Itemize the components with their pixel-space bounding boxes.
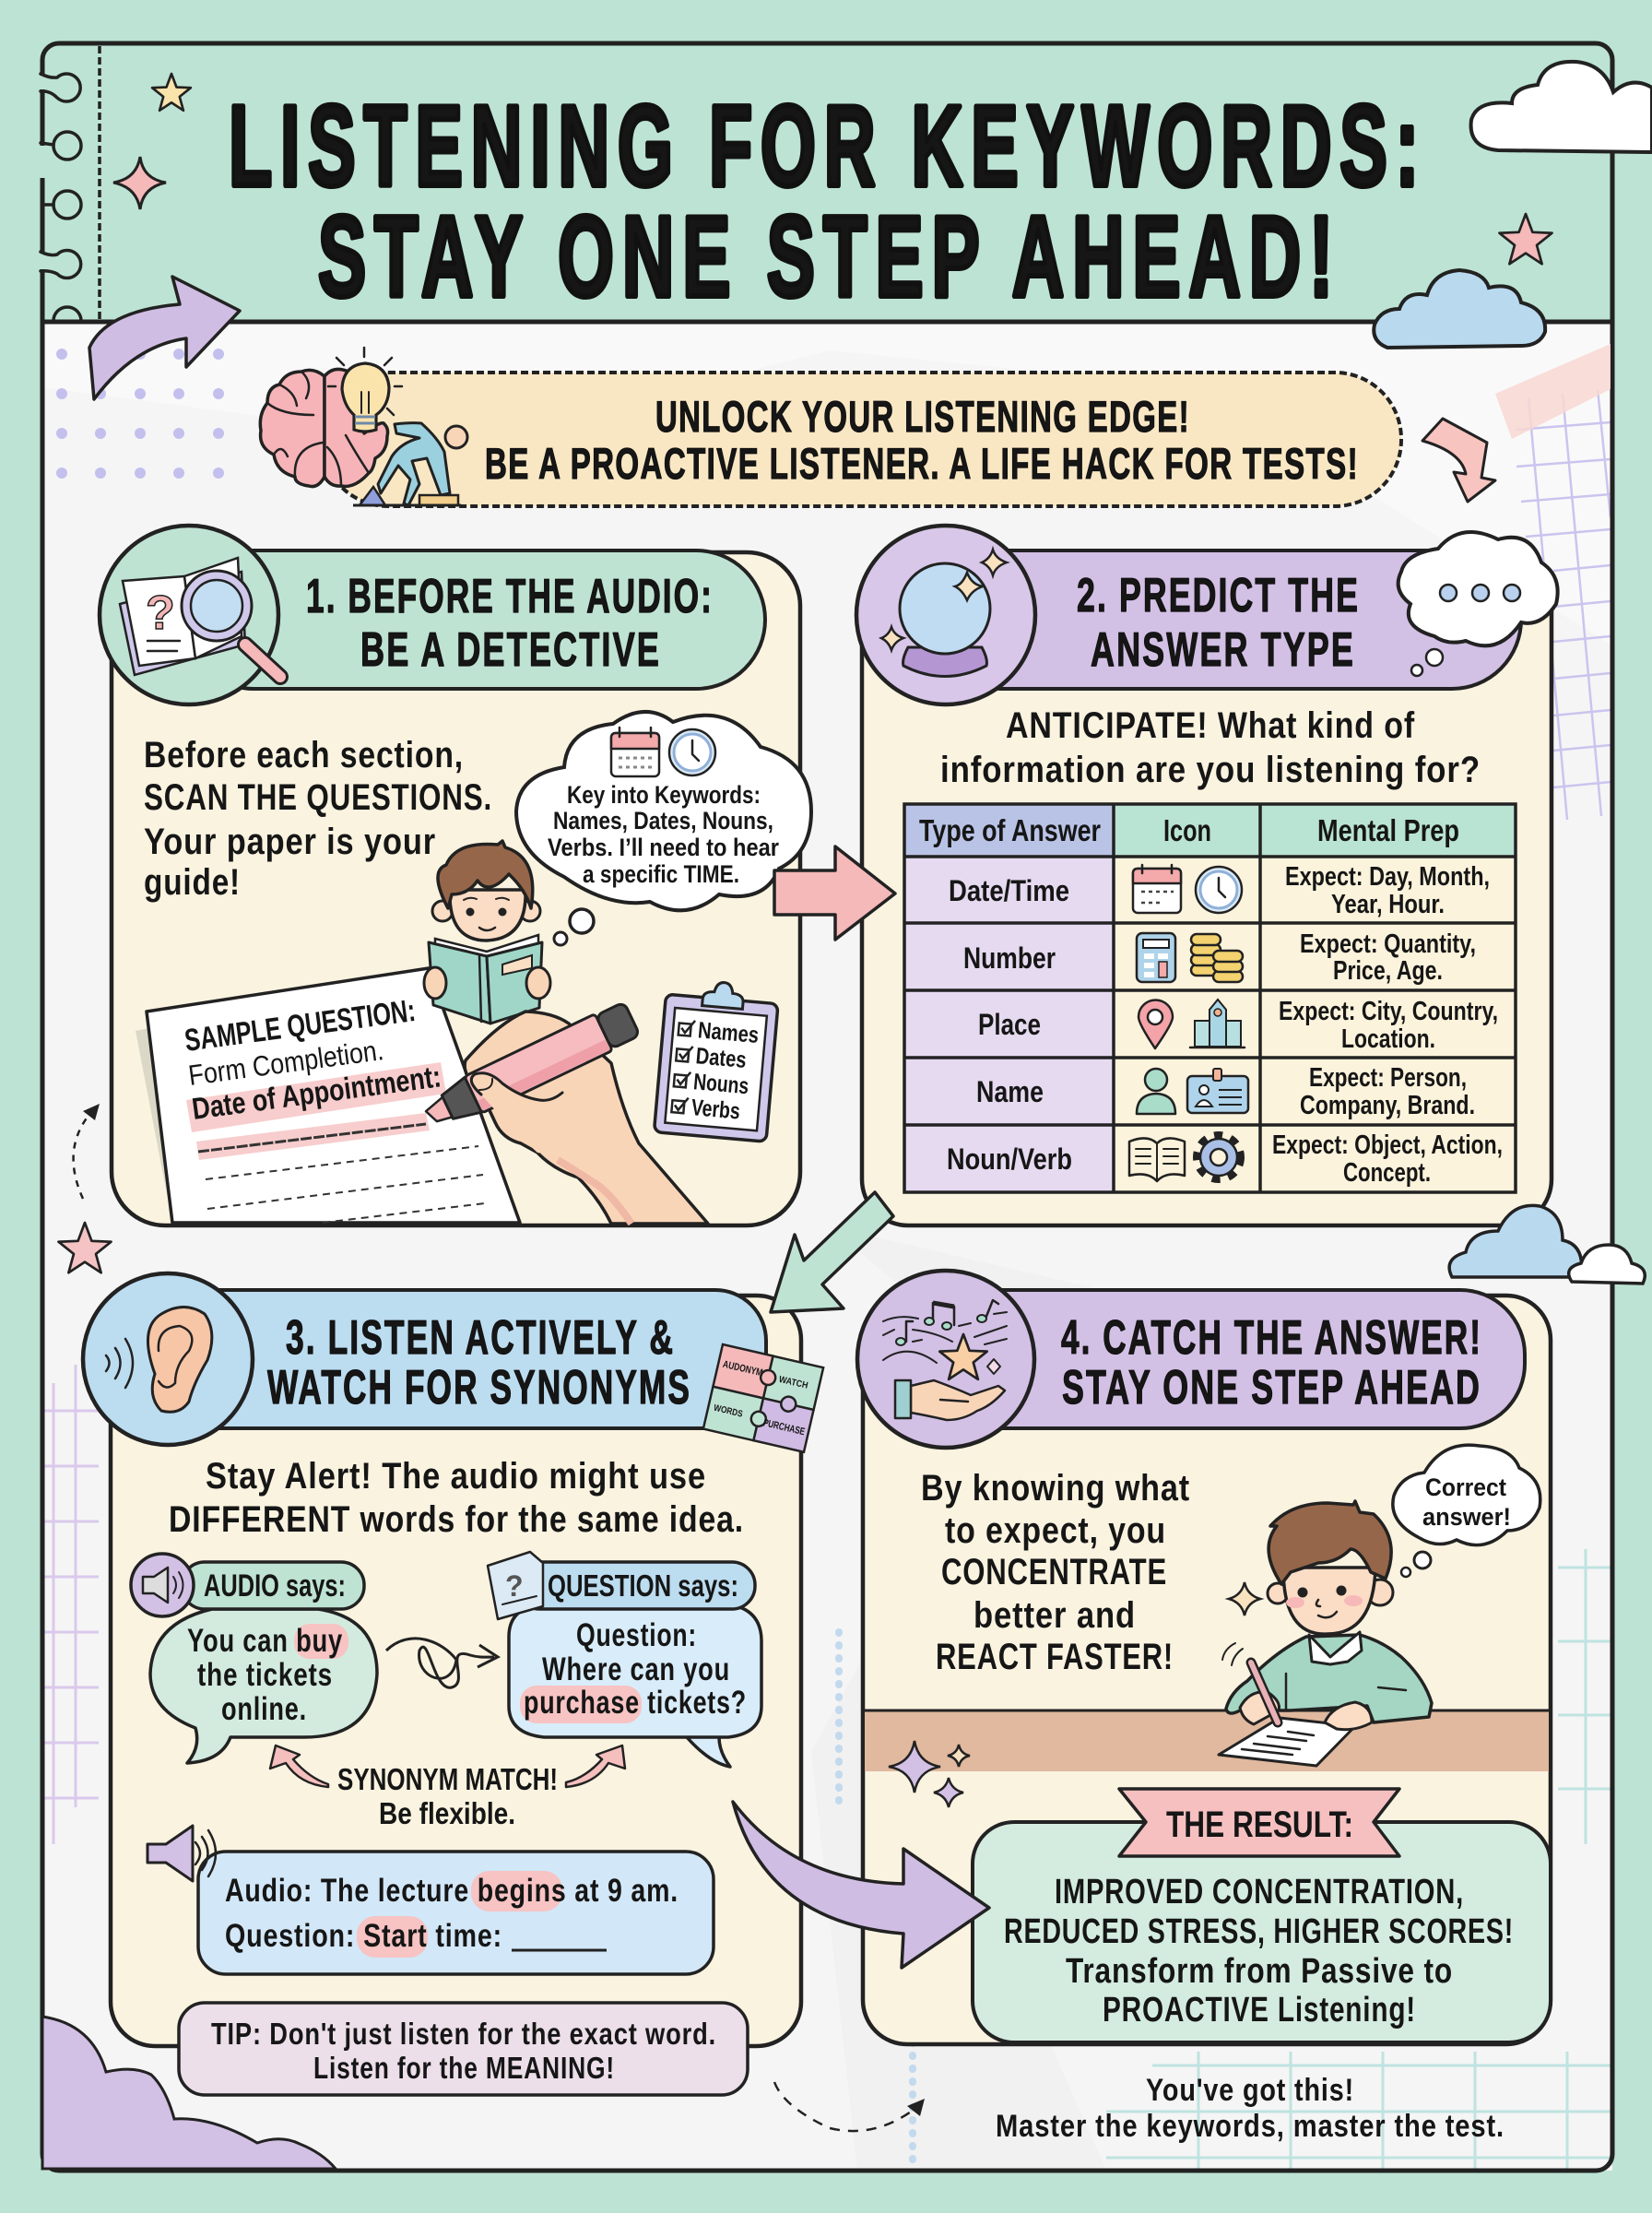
- squiggle arrow: [386, 1639, 498, 1687]
- boy reading: [424, 841, 550, 1024]
- panel 1 header: [184, 550, 765, 689]
- table mental prep text: Price, Age.: [1333, 956, 1443, 986]
- cloud: white top right: [1471, 62, 1652, 152]
- icon: calendar and clock: [1133, 865, 1242, 913]
- panel 3 title: 3. LISTEN ACTIVELY &: [286, 1311, 675, 1365]
- star: yellow: [152, 74, 191, 111]
- thought cloud: keywords: Verbs. I’ll need to hear: [548, 834, 779, 861]
- table header row: Type of Answer: [919, 813, 1101, 847]
- notebook margin: [98, 46, 101, 322]
- synonym match text: SYNONYM MATCH!: [337, 1762, 558, 1796]
- panel 3 icon: ear: [83, 1273, 253, 1445]
- thought cloud: keywords: Key into Keywords:: [567, 781, 761, 809]
- table row labels: [947, 874, 1072, 1176]
- panel 1 body text: guide!: [144, 862, 241, 903]
- header band divider: [42, 319, 1612, 325]
- icon: calculator and coins: [1137, 933, 1243, 982]
- speech bubble: audio says: the tickets: [197, 1657, 333, 1693]
- synonym match text: Be flexible.: [379, 1796, 515, 1830]
- clipboard checklist: Dates: [695, 1043, 748, 1073]
- panel 1 body text: SCAN THE QUESTIONS.: [144, 777, 492, 818]
- arrow: green panel 2 to 3: [771, 1192, 893, 1312]
- table mental prep text: Expect: Quantity,: [1300, 929, 1476, 959]
- panel 1 icon: book and magnifier: [100, 526, 280, 704]
- synonym match text: [337, 1762, 558, 1830]
- puzzle icon: PURCHASE: [762, 1417, 806, 1438]
- closing message: [996, 2073, 1504, 2144]
- panel 1 body text: [144, 735, 492, 903]
- result box: [973, 1822, 1551, 2042]
- speech bubble: question says: Question:: [576, 1617, 697, 1653]
- table mental prep text: Concept.: [1343, 1158, 1431, 1188]
- decorative dots: [56, 349, 224, 479]
- icon: person and id card: [1137, 1069, 1248, 1114]
- table row labels: Date/Time: [949, 874, 1069, 907]
- banner text: UNLOCK YOUR LISTENING EDGE!: [655, 392, 1190, 441]
- panel 4: catch the answer: [857, 1271, 1551, 2044]
- closing message: You've got this!: [1146, 2073, 1354, 2108]
- puzzle icon: AUDONYM: [722, 1359, 763, 1379]
- speech bubble: question says: ?: [505, 1569, 524, 1603]
- speech bubble: audio says: You can buy: [187, 1623, 343, 1659]
- notebook frame gaps: [39, 76, 46, 269]
- speech bubble: question says: QUESTION says:: [548, 1568, 738, 1603]
- sample question sheet: [136, 968, 520, 1223]
- panel 4 body text: CONCENTRATE: [941, 1552, 1167, 1592]
- arrow: purple top left: [89, 277, 240, 399]
- speech bubble: question says: Where can you: [542, 1651, 730, 1687]
- panel 2 intro text: [940, 705, 1481, 790]
- tip box: Listen for the MEANING!: [313, 2051, 615, 2085]
- panel 3 title: WATCH FOR SYNONYMS: [267, 1361, 691, 1414]
- table mental prep text: Company, Brand.: [1300, 1091, 1475, 1120]
- arrow: large purple to result: [733, 1802, 989, 1968]
- puzzle icon: WATCH: [778, 1375, 808, 1391]
- purple cloud bottom left: [42, 2017, 336, 2169]
- sparkle: cream: [1229, 1582, 1260, 1615]
- example box: Audio: The lecture begins at 9 am.: [225, 1873, 678, 1909]
- table row labels: Name: [976, 1075, 1044, 1108]
- sample question sheet: Date of Appointment:: [190, 1059, 443, 1126]
- puzzle icon: WORDS: [713, 1403, 744, 1420]
- panel 1 title: 1. BEFORE THE AUDIO:: [306, 570, 714, 623]
- banner text: [485, 392, 1359, 488]
- thought cloud: correct answer: Correct: [1425, 1473, 1506, 1501]
- thought cloud: keywords: [516, 712, 811, 945]
- panel 2 title: 2. PREDICT THE: [1077, 569, 1360, 622]
- sparkle: pink: [113, 157, 166, 209]
- result banner: THE RESULT:: [1166, 1805, 1353, 1845]
- closing message: Master the keywords, master the test.: [996, 2109, 1504, 2144]
- panel 2 title: ANSWER TYPE: [1091, 623, 1355, 677]
- result box: Transform from Passive to: [1066, 1952, 1453, 1991]
- panel 2 header: [931, 550, 1521, 689]
- example box: [198, 1852, 714, 1974]
- decorative dot column: [839, 1632, 913, 2167]
- hand with highlighter: [419, 1000, 708, 1224]
- panel 4 body text: better and: [974, 1595, 1136, 1636]
- panel 2: predict the answer type: [856, 526, 1558, 1225]
- sparkles: desk: [889, 1741, 970, 1807]
- panel 3 intro text: [169, 1456, 744, 1540]
- panel 3 header: [157, 1290, 766, 1428]
- panel 4 body text: REACT FASTER!: [936, 1637, 1174, 1677]
- cloud: blue top right: [1374, 270, 1545, 348]
- icon: brain, bulb and climber: [260, 348, 467, 505]
- result box: PROACTIVE Listening!: [1103, 1991, 1416, 2030]
- star: pink left margin: [58, 1223, 112, 1272]
- clipboard checklist: Names: [697, 1017, 760, 1048]
- thought cloud: dots: [1398, 532, 1558, 676]
- table mental prep text: Expect: Person,: [1309, 1063, 1467, 1093]
- panel 1 body text: Before each section,: [144, 735, 464, 775]
- result banner: [1119, 1789, 1399, 1856]
- table mental prep text: Location.: [1341, 1024, 1435, 1054]
- panel 1 body text: Your paper is your: [144, 822, 436, 862]
- table header row: Icon: [1163, 813, 1211, 847]
- table header row: Mental Prep: [1317, 813, 1459, 847]
- intro banner: [322, 373, 1401, 506]
- panel 2 title: [1077, 569, 1360, 677]
- cloud: blue and white right margin: [1449, 1205, 1645, 1284]
- panel 4 body text: By knowing what: [921, 1468, 1190, 1509]
- sample question sheet: SAMPLE QUESTION:: [183, 993, 418, 1059]
- panel 4 header: [931, 1290, 1525, 1428]
- pink tape: [1495, 344, 1611, 439]
- table row labels: Number: [963, 941, 1056, 975]
- panel 1 icon: book and magnifier: ?: [146, 586, 175, 640]
- panel 2 icon: crystal ball: [856, 526, 1035, 704]
- thought cloud: correct answer: answer!: [1422, 1503, 1511, 1531]
- arrow: dashed bottom: [774, 2082, 925, 2131]
- arrow: pink panel 1 to 2: [774, 846, 895, 940]
- paper body: [42, 322, 1612, 2171]
- result box: IMPROVED CONCENTRATION,: [1055, 1873, 1464, 1911]
- title: [229, 83, 1427, 321]
- tip box: TIP: Don't just listen for the exact word.: [211, 2017, 716, 2051]
- panel 4 body text: to expect, you: [945, 1510, 1166, 1551]
- arrows: synonym match: [270, 1746, 625, 1787]
- clipboard checklist: [654, 977, 780, 1142]
- speech bubble: question says: [488, 1552, 761, 1767]
- arrow: pink curved beside banner: [1422, 419, 1495, 502]
- star: pink: [1499, 214, 1552, 264]
- clipboard checklist: Nouns: [692, 1069, 749, 1099]
- table header row: [919, 813, 1459, 847]
- thought cloud: keywords: Names, Dates, Nouns,: [553, 807, 773, 834]
- panel 3: listen actively: [83, 1273, 823, 2046]
- sample question sheet: Form Completion.: [186, 1034, 385, 1092]
- boy writing: [1219, 1501, 1432, 1766]
- thought cloud: keywords: a specific TIME.: [583, 860, 739, 888]
- binder rings: [41, 74, 81, 321]
- table mental prep text: Expect: City, Country,: [1279, 997, 1498, 1026]
- panel 4 title: [1061, 1311, 1482, 1414]
- table mental prep text: Expect: Object, Action,: [1272, 1130, 1503, 1160]
- panel 3 intro text: DIFFERENT words for the same idea.: [169, 1499, 744, 1540]
- panel 1 title: BE A DETECTIVE: [360, 623, 661, 677]
- table row labels: Place: [978, 1008, 1041, 1041]
- answer type table: [904, 804, 1516, 1192]
- speech bubble: audio says: [131, 1554, 377, 1763]
- table row labels: Noun/Verb: [947, 1142, 1072, 1176]
- table mental prep text: [1272, 862, 1503, 1188]
- panel 4 icon: hand catching star: [857, 1271, 1034, 1448]
- panel 1: before the audio: [100, 526, 811, 1225]
- desk band: [865, 1710, 1549, 1771]
- panel 4 body text: [921, 1468, 1190, 1677]
- example box: Question: Start time:: [225, 1918, 502, 1954]
- speech bubble: audio says: online.: [221, 1691, 307, 1727]
- clipboard checklist: Verbs: [690, 1095, 741, 1125]
- panel 2 intro text: information are you listening for?: [940, 750, 1481, 790]
- panel 3 title: [267, 1311, 691, 1414]
- arrow: dashed left margin: [74, 1104, 100, 1199]
- panel 2 intro text: ANTICIPATE! What kind of: [1006, 705, 1415, 746]
- tip box: [179, 2003, 748, 2095]
- icon: book and gear: [1129, 1135, 1241, 1181]
- speech bubble: question says: purchase tickets?: [524, 1685, 747, 1721]
- table mental prep text: Expect: Day, Month,: [1285, 862, 1490, 892]
- speech bubble: audio says: AUDIO says:: [204, 1568, 346, 1604]
- icon: pin and building: [1139, 1000, 1245, 1048]
- panel 1 title: [306, 570, 714, 677]
- panel 3 intro text: Stay Alert! The audio might use: [206, 1456, 706, 1497]
- icon: speaker: [148, 1826, 216, 1881]
- thought cloud: correct answer: [1393, 1445, 1540, 1577]
- table mental prep text: Year, Hour.: [1331, 890, 1445, 919]
- puzzle icon: [703, 1344, 823, 1452]
